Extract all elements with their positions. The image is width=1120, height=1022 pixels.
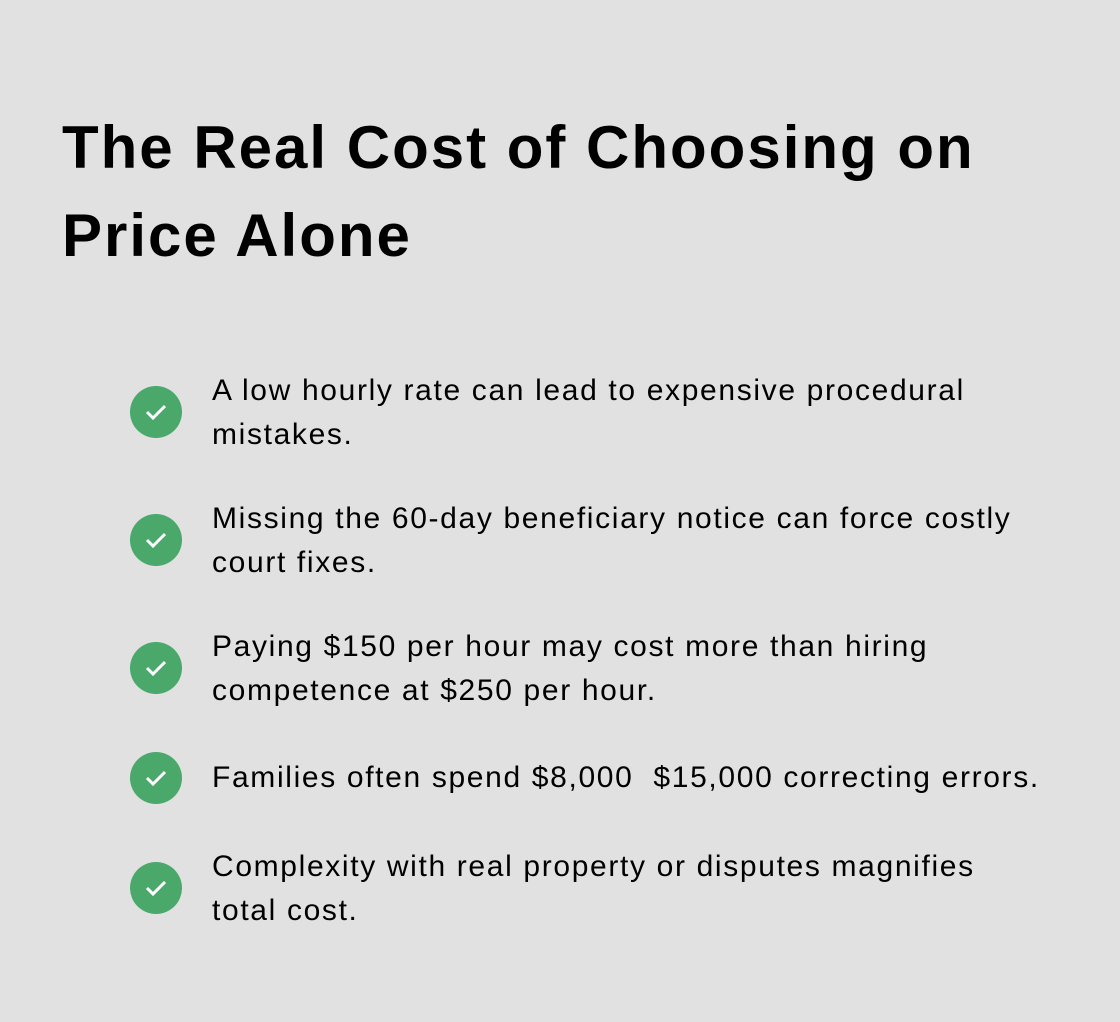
icon: check [130,752,182,804]
text: Missing the 60-day beneficiary notice can force costly [212,502,1011,535]
title: Price Alone [62,202,412,269]
text: Paying $150 per hour may cost more than hiring [212,630,928,663]
text: Families often spend $8,000 $15,000 correcting errors. [212,761,1040,794]
text: mistakes. [212,418,354,451]
title: The Real Cost of Choosing on [62,114,975,181]
text [212,374,965,451]
text: Complexity with real property or disputes magnifies [212,850,975,883]
icon: check [130,514,182,566]
item 3 [130,630,928,707]
item 5 [130,850,975,927]
text: A low hourly rate can lead to expensive procedural [212,374,965,407]
item 2 [130,502,1011,579]
icon: check [130,642,182,694]
icon: check [130,386,182,438]
item 1 [130,374,965,451]
text [212,850,975,927]
icon: check [130,862,182,914]
text: total cost. [212,894,359,927]
text: competence at $250 per hour. [212,674,657,707]
text [212,630,928,707]
text: court fixes. [212,546,377,579]
text [212,502,1011,579]
item 4 [130,752,1040,804]
title [62,114,975,269]
